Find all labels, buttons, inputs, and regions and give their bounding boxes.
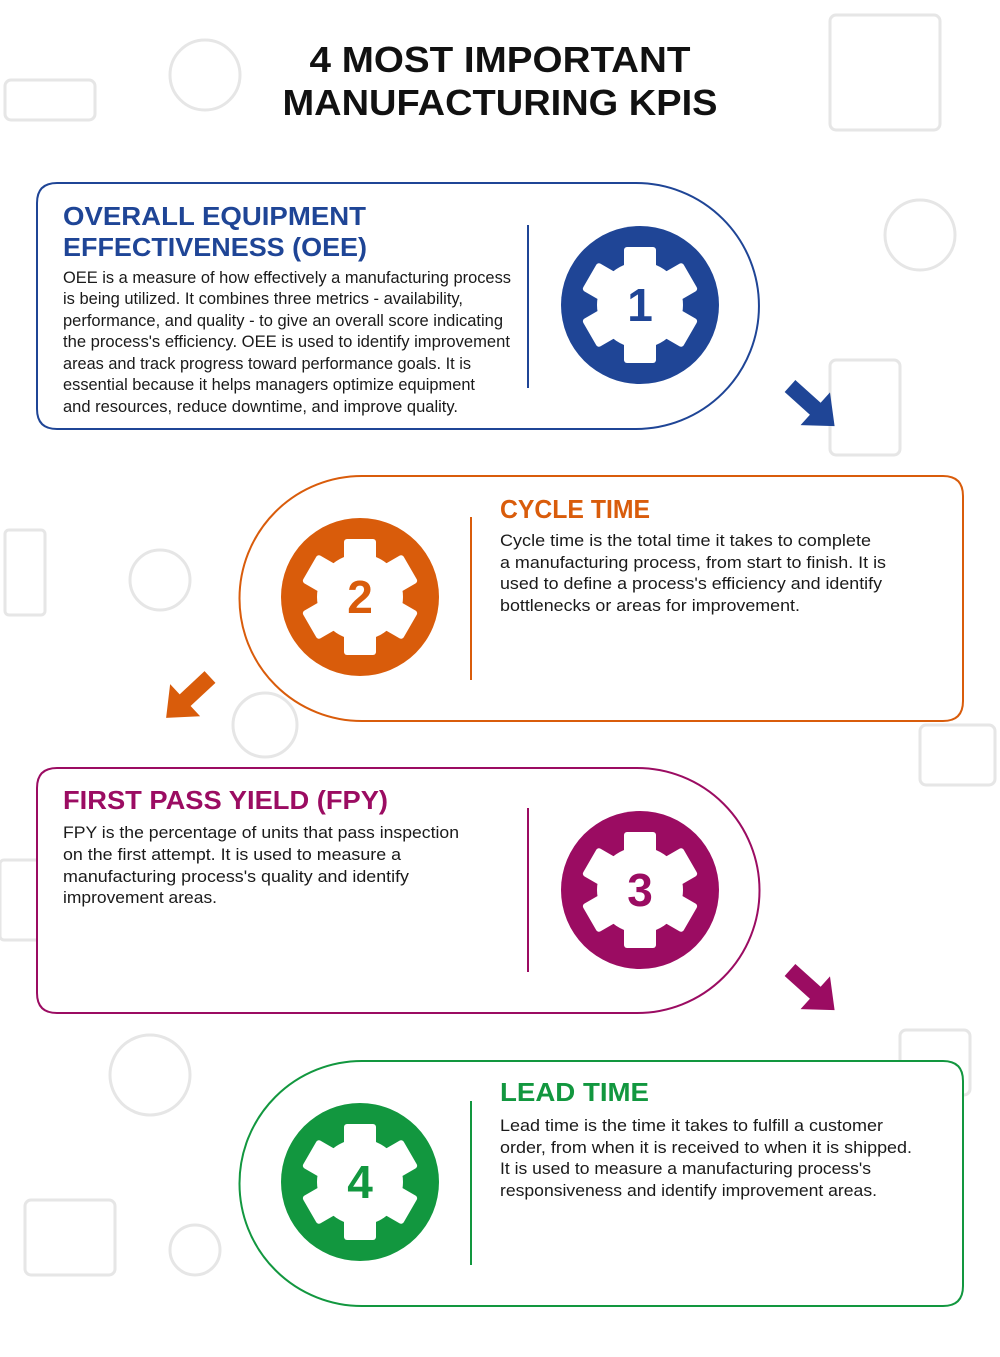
text: OEE description — [63, 268, 511, 416]
arrow: orange — [151, 661, 225, 734]
text: FPY description: manufacturing process's quality and identify — [63, 867, 410, 886]
heading: cycle time: CYCLE TIME — [500, 494, 650, 524]
text: cycle time description — [500, 531, 886, 615]
icon: gear 1: 1 — [627, 279, 653, 331]
heading: OEE: OVERALL EQUIPMENT — [63, 201, 366, 231]
heading: lead time: LEAD TIME — [500, 1077, 649, 1107]
text: lead time description: order, from when it is received to when it is shipped. — [500, 1138, 912, 1157]
text: cycle time description: used to define a process's efficiency and identify — [500, 574, 883, 593]
heading: FPY: FIRST PASS YIELD (FPY) — [63, 785, 388, 815]
panel: Lead Time — [239, 1061, 963, 1306]
icon: gear 1 — [561, 226, 719, 384]
title: 4 MOST IMPORTANT — [310, 39, 691, 80]
text: OEE description: and resources, reduce downtime, and improve quality. — [63, 397, 458, 416]
icon: gear 2: 2 — [347, 571, 373, 623]
icon: gear 3: 3 — [627, 864, 653, 916]
arrow: blue — [775, 370, 849, 442]
text: OEE description: OEE is a measure of how effectively a manufacturing process — [63, 268, 511, 287]
text: lead time description — [500, 1116, 912, 1200]
panel: Cycle Time — [239, 476, 963, 721]
panel: OEE — [37, 183, 759, 429]
heading: OEE — [63, 201, 367, 262]
icon: gear 3 — [561, 811, 719, 969]
text: OEE description: is being utilized. It combines three metrics - availability, — [63, 289, 463, 308]
text: OEE description: essential because it helps managers optimize equipment — [63, 375, 475, 394]
text: FPY description: on the first attempt. It is used to measure a — [63, 845, 402, 864]
text: OEE description: the process's efficiency. OEE is used to identify improvement — [63, 332, 510, 351]
text: OEE description: areas and track progress toward performance goals. It is — [63, 354, 471, 373]
text: FPY description: FPY is the percentage of units that pass inspection — [63, 823, 459, 842]
text: cycle time description: bottlenecks or areas for improvement. — [500, 596, 800, 615]
icon: gear 4 — [281, 1103, 439, 1261]
arrow: purple — [775, 954, 849, 1026]
text: OEE description: performance, and quality - to give an overall score indicating — [63, 311, 503, 330]
title — [282, 39, 718, 123]
panel: FPY — [37, 768, 760, 1013]
text: cycle time description: Cycle time is the total time it takes to complete — [500, 531, 871, 550]
heading: OEE: EFFECTIVENESS (OEE) — [63, 232, 367, 262]
title: MANUFACTURING KPIS — [282, 82, 718, 123]
text: lead time description: Lead time is the time it takes to fulfill a customer — [500, 1116, 883, 1135]
icon: gear 4: 4 — [347, 1156, 373, 1208]
icon: gear 2 — [281, 518, 439, 676]
text: lead time description: responsiveness and identify improvement areas. — [500, 1181, 877, 1200]
text: FPY description — [63, 823, 459, 907]
text: cycle time description: a manufacturing process, from start to finish. It is — [500, 553, 886, 572]
text: FPY description: improvement areas. — [63, 888, 217, 907]
text: lead time description: It is used to measure a manufacturing process's — [500, 1159, 871, 1178]
